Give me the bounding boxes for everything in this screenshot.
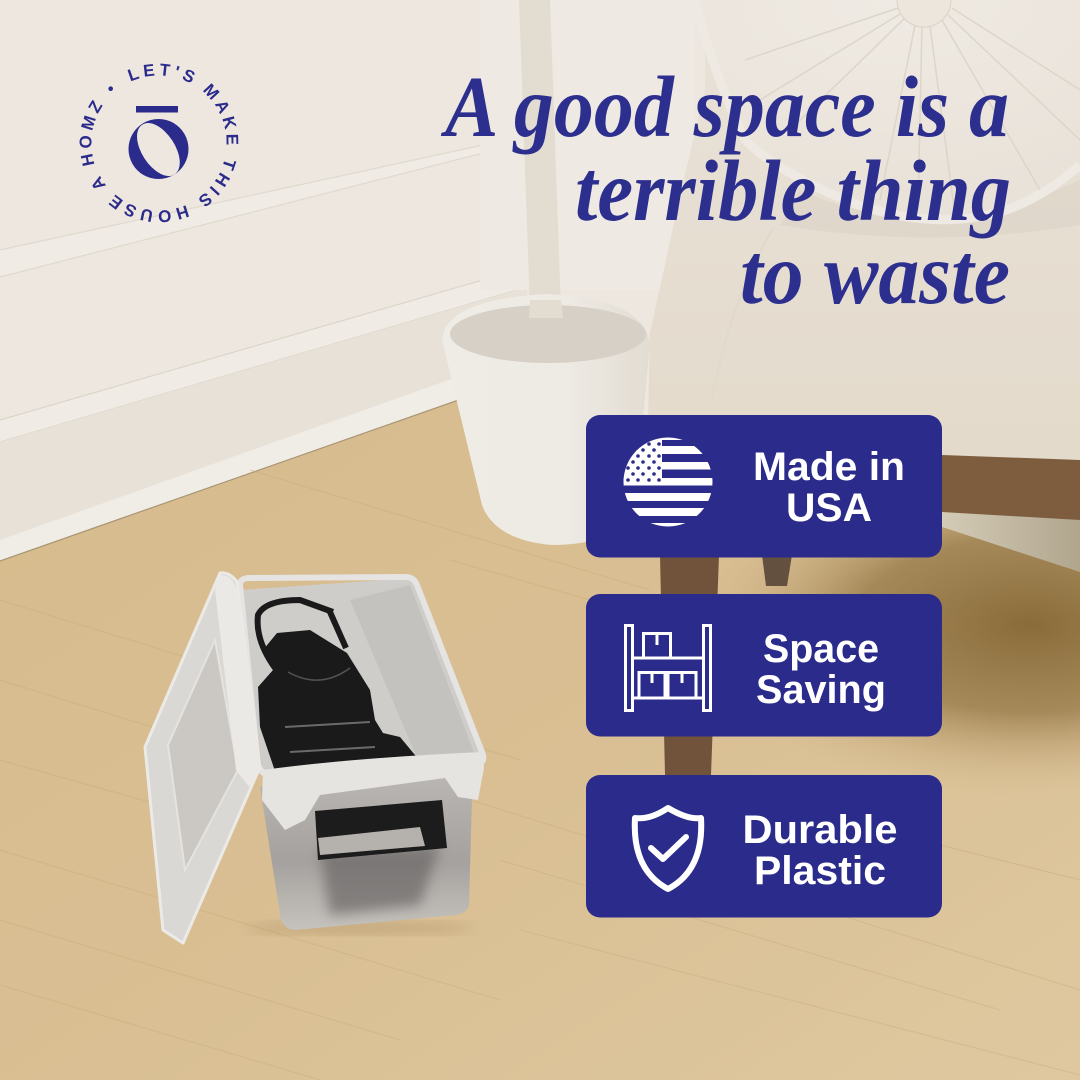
label: Saving [756, 668, 886, 712]
label: Durable [742, 808, 898, 852]
box body [260, 760, 473, 930]
logo dot [108, 86, 113, 91]
logo [80, 64, 238, 222]
box rim [240, 577, 483, 775]
chair [648, 0, 1080, 775]
product: storage box with sandal [145, 573, 484, 943]
icon: shield with check [635, 808, 701, 889]
badge: made in USA [586, 415, 942, 558]
chair rail [942, 455, 1080, 520]
chair legs [660, 555, 719, 775]
label: Made in [753, 445, 905, 489]
front latch [315, 800, 447, 860]
title [440, 58, 1011, 322]
shadow beneath chair [680, 450, 1080, 800]
sandal [258, 600, 425, 777]
round pillow [695, 0, 1080, 220]
icon: shelf with boxes [626, 626, 710, 710]
logo circular text: LET'S MAKE THIS HOUSE A HOMZ [80, 64, 238, 222]
title: A good space is a [440, 58, 1009, 155]
badge: durable plastic [586, 775, 942, 918]
box interior [240, 578, 483, 775]
chair back and seat [648, 0, 1080, 460]
floor [0, 376, 1080, 1080]
logo mark: o with macron [129, 106, 189, 179]
title: to waste [740, 225, 1010, 322]
label: Space [763, 627, 879, 671]
icon: US flag circle [624, 438, 712, 526]
open lid [145, 573, 260, 943]
label: USA [786, 486, 872, 530]
planter pot [442, 294, 650, 545]
plant stem [519, 0, 561, 310]
badge: space saving [586, 594, 942, 736]
title: terrible thing [575, 142, 1011, 239]
wall moulding and baseboard [0, 0, 695, 560]
label: Plastic [754, 849, 886, 893]
baseboard wedge beyond chair [942, 512, 1080, 572]
